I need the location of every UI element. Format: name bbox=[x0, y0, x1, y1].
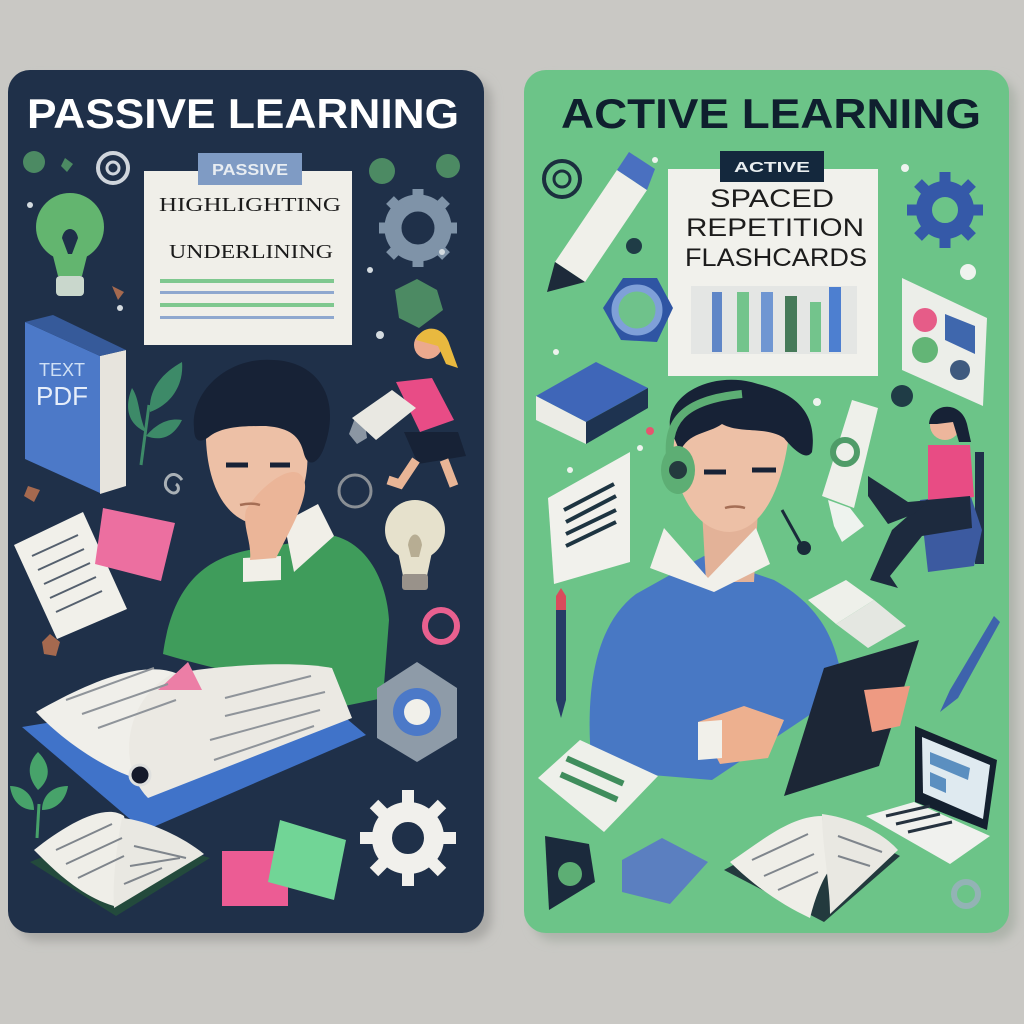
open book bbox=[22, 662, 366, 831]
book: text pdf: TEXT bbox=[39, 360, 85, 380]
figure: active student bbox=[590, 380, 844, 780]
icon: green light bulb bbox=[36, 193, 104, 296]
note card: spaced repetition flashcards: FLASHCARDS bbox=[685, 244, 867, 272]
note card: highlighting and underlining bbox=[144, 153, 352, 345]
blue book bbox=[536, 362, 648, 444]
icons bottom bbox=[545, 836, 708, 910]
figure: running student bbox=[352, 329, 466, 486]
note card: highlighting and underlining: PASSIVE bbox=[212, 162, 288, 179]
small decorative icons bbox=[23, 151, 460, 656]
tablet bbox=[784, 640, 919, 796]
note card: highlighting and underlining: UNDERLINING bbox=[169, 241, 333, 263]
icon: grey ring bbox=[954, 882, 978, 906]
icon: target bbox=[544, 161, 580, 197]
note card: spaced repetition flashcards: ACTIVE bbox=[734, 159, 810, 176]
sticky note: page with pink note bbox=[14, 508, 175, 639]
open book bbox=[724, 814, 900, 922]
papers bbox=[808, 580, 906, 648]
panel: passive learning bbox=[8, 70, 484, 933]
bulb: white light bulb bbox=[385, 500, 445, 590]
decorative pink ring bbox=[425, 610, 457, 642]
pencils bbox=[556, 588, 1000, 718]
small book bbox=[538, 740, 658, 832]
chart card bbox=[902, 278, 987, 406]
panel: active learning bbox=[524, 70, 1009, 933]
icon: white gear bbox=[360, 790, 456, 886]
icon: target bbox=[98, 153, 128, 183]
heading: passive learning: PASSIVE LEARNING bbox=[27, 90, 459, 137]
note card: highlighting and underlining: HIGHLIGHTING bbox=[159, 194, 341, 216]
note card: spaced repetition flashcards bbox=[668, 151, 878, 376]
book: text pdf bbox=[25, 315, 126, 494]
icon: pencil bbox=[547, 152, 655, 292]
book: text pdf: PDF bbox=[36, 381, 88, 411]
figure: passive student bbox=[163, 360, 389, 708]
figure: seated student with laptop bbox=[868, 407, 984, 588]
icon: hex ring bbox=[377, 662, 457, 762]
page: document bbox=[548, 452, 630, 584]
icon: blue ring bbox=[603, 278, 673, 342]
heading: active learning: ACTIVE LEARNING bbox=[561, 90, 981, 137]
small decor bbox=[553, 157, 976, 542]
icon: leaf bbox=[10, 752, 68, 838]
laptop bbox=[866, 726, 997, 864]
small open book bbox=[30, 812, 210, 916]
icon: gear bbox=[379, 189, 457, 267]
sticky notes: pink and green bbox=[222, 820, 346, 906]
note card: spaced repetition flashcards: SPACED bbox=[710, 185, 834, 213]
icon: leaf sprig bbox=[128, 362, 182, 465]
note card: spaced repetition flashcards: REPETITION bbox=[686, 214, 864, 242]
bar chart bbox=[691, 286, 857, 354]
icon: blue gear bbox=[907, 172, 983, 248]
card: ring bbox=[822, 400, 878, 508]
